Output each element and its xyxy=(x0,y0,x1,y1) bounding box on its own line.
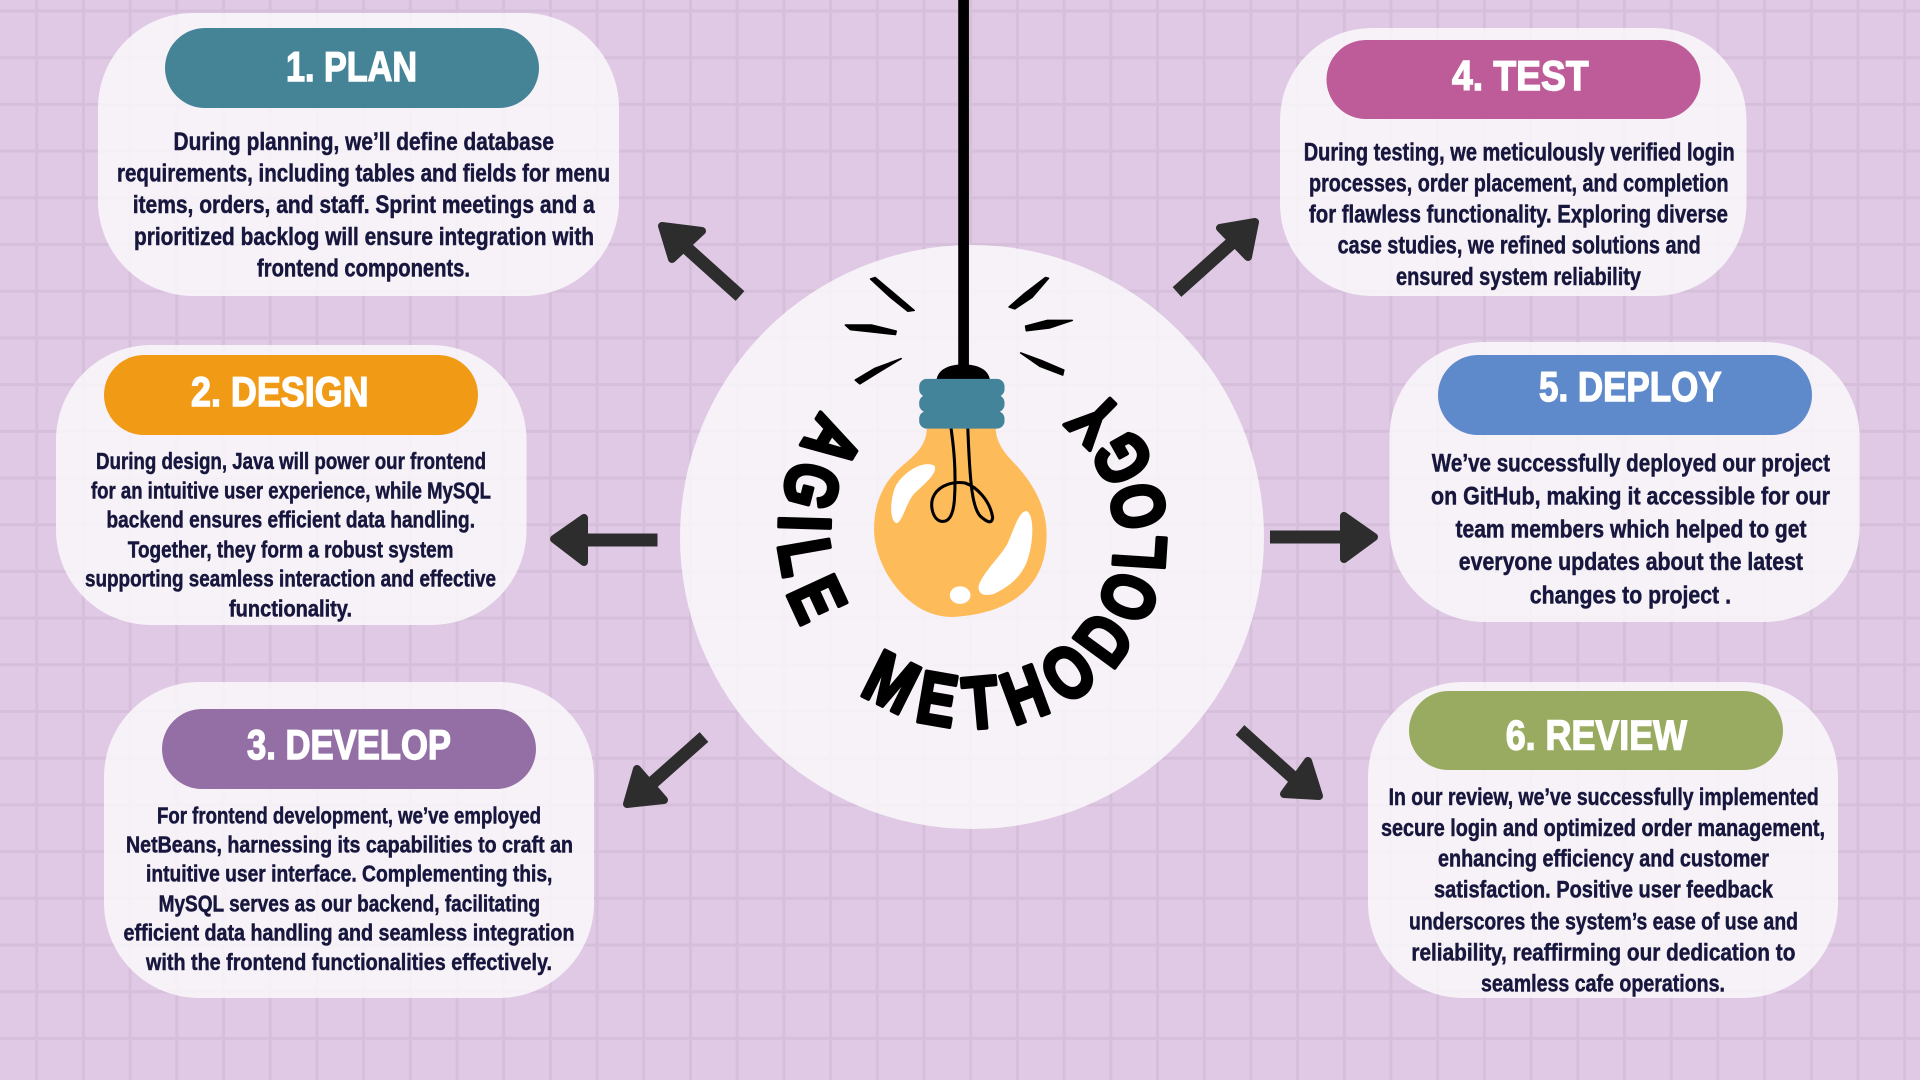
text block: review: secure login and optimized order management, xyxy=(1381,815,1825,842)
heading: 6. Review xyxy=(1409,691,1783,770)
text block: plan xyxy=(117,128,610,283)
panel: center circle with light bulb xyxy=(680,0,1264,829)
heading: 1. Plan: 1. PLAN xyxy=(286,43,417,90)
text block: review: In our review, we’ve successfully implemented xyxy=(1389,784,1819,811)
text block: review: seamless cafe operations. xyxy=(1481,971,1725,998)
heading: 5. Deploy xyxy=(1438,355,1812,435)
heading: 3. Develop: 3. DEVELOP xyxy=(247,721,451,768)
text block: develop: with the frontend functionalities effectively. xyxy=(145,949,552,975)
text block: design: functionality. xyxy=(229,596,352,622)
title: curved text: AGILE METHODOLOGY xyxy=(776,396,1168,730)
text block: test: ensured system reliability xyxy=(1396,263,1641,291)
text block: develop: For frontend development, we’ve employed xyxy=(157,802,541,828)
panel: 3. Develop xyxy=(104,682,594,998)
text block: develop: efficient data handling and seamless integration xyxy=(124,920,574,946)
text block: review: enhancing efficiency and customer xyxy=(1438,846,1769,873)
text block: develop: MySQL serves as our backend, facilitating xyxy=(159,890,540,916)
icon: light bulb with cord and rays xyxy=(845,0,1072,617)
arrow: to Develop xyxy=(627,737,704,804)
text block: design: backend ensures efficient data handling. xyxy=(106,507,475,533)
arrow: to Review xyxy=(1240,730,1319,796)
text block: deploy: everyone updates about the latest xyxy=(1459,548,1804,576)
panel: 2. Design xyxy=(56,345,526,625)
panel: 4. Test xyxy=(1280,28,1746,296)
text block: deploy: on GitHub, making it accessible for our xyxy=(1431,482,1830,510)
arrow: to Plan xyxy=(662,226,740,296)
text block: deploy: changes to project . xyxy=(1530,581,1731,609)
arrow: to Deploy xyxy=(1270,516,1374,559)
text block: plan: During planning, we’ll define database xyxy=(174,128,554,156)
text block: deploy: We’ve successfully deployed our project xyxy=(1432,450,1831,478)
text block: design xyxy=(85,448,496,622)
text block: design: for an intuitive user experience, while MySQL xyxy=(91,477,491,503)
heading: 5. Deploy: 5. DEPLOY xyxy=(1539,363,1722,410)
heading: 3. Develop xyxy=(162,709,536,789)
panel: 1. Plan xyxy=(98,13,619,296)
text block: plan: frontend components. xyxy=(257,255,470,283)
text block: deploy: team members which helped to get xyxy=(1456,515,1807,543)
panel: 6. Review xyxy=(1368,682,1838,998)
text block: plan: prioritized backlog will ensure integration with xyxy=(134,223,594,251)
heading: 4. Test: 4. TEST xyxy=(1452,52,1589,99)
text block: design: During design, Java will power our frontend xyxy=(96,448,486,474)
text block: test xyxy=(1304,139,1735,291)
panel: 5. Deploy xyxy=(1389,342,1860,622)
text block: plan: items, orders, and staff. Sprint meetings and a xyxy=(133,191,596,219)
text block: test: During testing, we meticulously verified login xyxy=(1304,139,1735,167)
text block: review: satisfaction. Positive user feedback xyxy=(1434,877,1774,904)
text block: develop: NetBeans, harnessing its capabilities to craft an xyxy=(126,832,573,858)
arrow: to Test xyxy=(1177,222,1255,292)
text block: design: Together, they form a robust system xyxy=(128,536,454,562)
text block: review xyxy=(1381,784,1825,998)
text block: plan: requirements, including tables and fields for menu xyxy=(117,160,610,188)
heading: 1. Plan xyxy=(165,28,539,108)
text block: test: for flawless functionality. Exploring diverse xyxy=(1309,201,1728,229)
text block: review: underscores the system’s ease of use and xyxy=(1409,908,1798,935)
text block: deploy xyxy=(1431,450,1831,609)
heading: 2. Design xyxy=(104,355,478,435)
heading: 2. Design: 2. DESIGN xyxy=(191,368,369,415)
heading: 4. Test xyxy=(1326,40,1700,119)
heading: 6. Review: 6. REVIEW xyxy=(1506,711,1687,758)
text block: test: case studies, we refined solutions and xyxy=(1338,231,1701,259)
text block: develop: intuitive user interface. Complementing this, xyxy=(146,861,552,887)
arrow: to Design xyxy=(554,518,658,562)
text block: test: processes, order placement, and completion xyxy=(1309,170,1729,198)
text block: develop xyxy=(124,802,574,975)
text block: review: reliability, reaffirming our dedication to xyxy=(1411,940,1795,967)
text block: design: supporting seamless interaction and effective xyxy=(85,566,496,592)
